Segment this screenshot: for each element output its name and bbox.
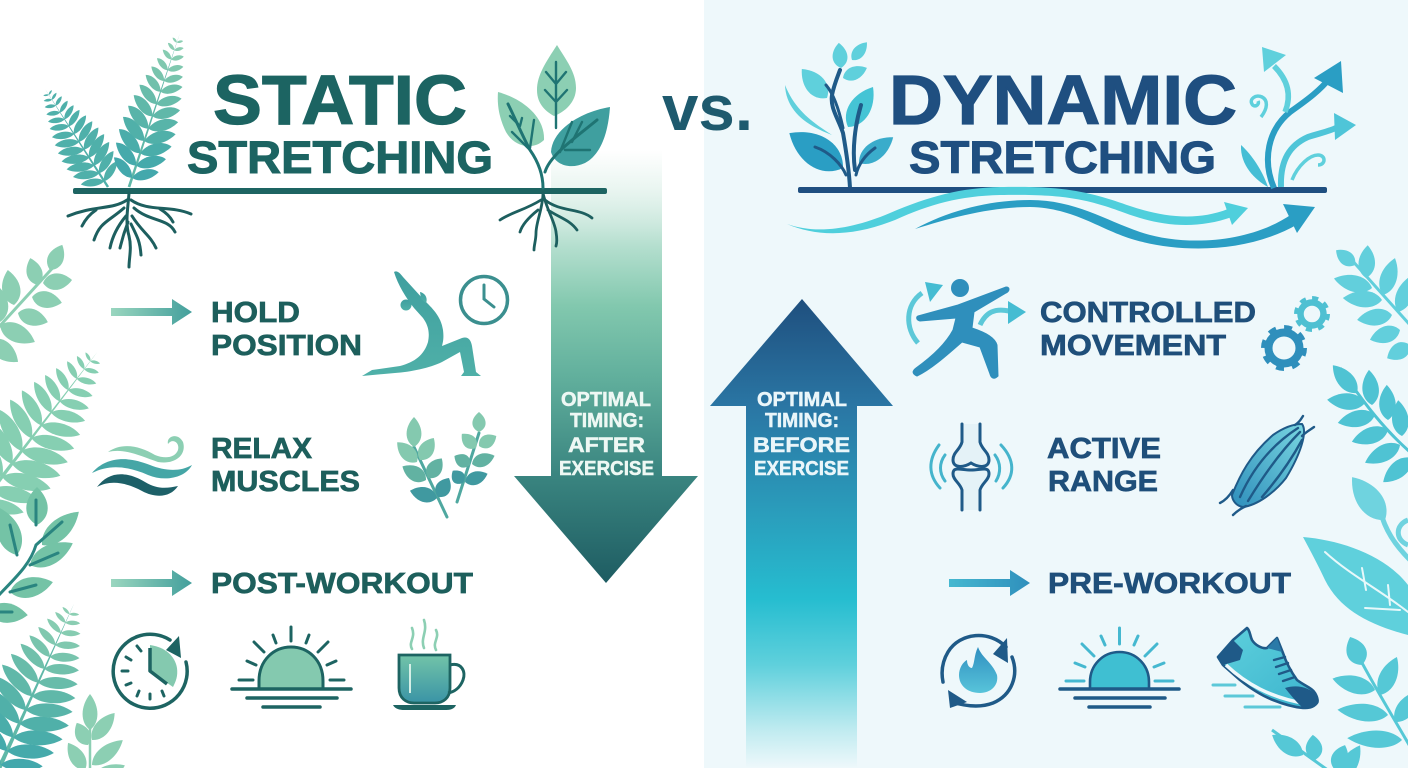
row: active range (931, 416, 1314, 515)
icon: twigs (392, 412, 500, 517)
subtitle: stretching: STRETCHING (187, 132, 493, 183)
branch mid right (1326, 360, 1408, 488)
versus label: vs. (662, 72, 753, 144)
small plant bottom (62, 694, 128, 768)
curled plant right (1342, 470, 1408, 560)
label: CONTROLLED (1040, 297, 1256, 329)
arrow label: before exercise (753, 389, 850, 480)
label: POST-WORKOUT (211, 568, 473, 600)
flowing wave arrow dark (915, 200, 1315, 248)
row: controlled movement (909, 279, 1328, 378)
left panel background (0, 0, 704, 768)
plant (781, 39, 899, 188)
label: ACTIVE (1047, 433, 1161, 465)
label: PRE-WORKOUT (1048, 568, 1291, 600)
icon: coffee cup (393, 620, 464, 710)
label: RANGE (1048, 466, 1158, 498)
right panel background (704, 0, 1408, 768)
foliage: right edge decoration (1268, 245, 1408, 768)
arrow (111, 570, 192, 596)
ground line (798, 187, 1327, 193)
label (1047, 433, 1161, 498)
row: post-workout (111, 568, 473, 600)
icon: running shoe (1213, 628, 1318, 708)
icon: sunrise right (1060, 628, 1179, 707)
branch top right (1332, 245, 1408, 365)
roots left (68, 193, 191, 267)
row: pre-workout (949, 568, 1291, 600)
label (211, 297, 362, 362)
arrow label: after exercise: OPTIMAL (561, 389, 651, 411)
plant stem and leaves (498, 45, 610, 188)
arrow label: after exercise: AFTER (568, 434, 645, 457)
arrow label: before exercise: TIMING: (765, 410, 839, 432)
large leaf right (1303, 537, 1408, 635)
arrow label: after exercise (559, 389, 654, 480)
icon: warm-up flame cycle (942, 636, 1015, 708)
branch bottom corner (1268, 728, 1367, 768)
arrow label: before exercise: EXERCISE (754, 458, 849, 480)
icon: sunset left (232, 627, 351, 707)
foliage: left edge decoration (0, 241, 136, 768)
leaf branch with dark stem (0, 487, 85, 625)
icon: waves (92, 436, 192, 496)
icon: clock (460, 276, 508, 324)
upward arrows and swirls (1241, 47, 1356, 188)
title: dynamic: DYNAMIC (889, 61, 1237, 139)
label: POSITION (211, 330, 362, 362)
up arrow: optimal timing before exercise (710, 299, 893, 768)
title: static: STATIC (213, 61, 467, 139)
header: dynamic stretching (781, 39, 1356, 248)
label: RELAX (211, 433, 313, 465)
flowing wave arrow light (787, 187, 1248, 233)
down arrow: optimal timing after exercise (514, 150, 698, 583)
label (1040, 297, 1256, 362)
label: MUSCLES (211, 466, 360, 498)
arrow (111, 299, 192, 325)
arrow (949, 570, 1030, 596)
row: relax muscles (92, 412, 500, 517)
icon: timer clock (113, 634, 187, 708)
icon: muscle (1220, 416, 1314, 515)
header: static stretching (22, 24, 610, 267)
arrow label: after exercise: EXERCISE (559, 458, 654, 480)
icon: gears (1264, 298, 1328, 368)
arrow label: before exercise: OPTIMAL (757, 389, 847, 411)
leaf branch top left (0, 241, 73, 369)
row: hold position (111, 271, 508, 376)
arrow label: before exercise: BEFORE (753, 434, 850, 457)
subtitle: stretching: STRETCHING (909, 132, 1216, 183)
icon: runner (909, 279, 1026, 378)
ground line (73, 188, 607, 194)
roots right (500, 193, 592, 250)
label: HOLD (211, 297, 300, 329)
fern mid left (0, 322, 136, 542)
ferns (22, 24, 208, 202)
label (211, 433, 360, 498)
branch bottom right (1330, 633, 1408, 750)
arrow label: after exercise: TIMING: (570, 410, 644, 432)
icon: yoga lunge (362, 271, 481, 376)
icon: knee joint (931, 424, 1012, 510)
label: MOVEMENT (1040, 330, 1226, 362)
fern bottom left (0, 584, 118, 768)
